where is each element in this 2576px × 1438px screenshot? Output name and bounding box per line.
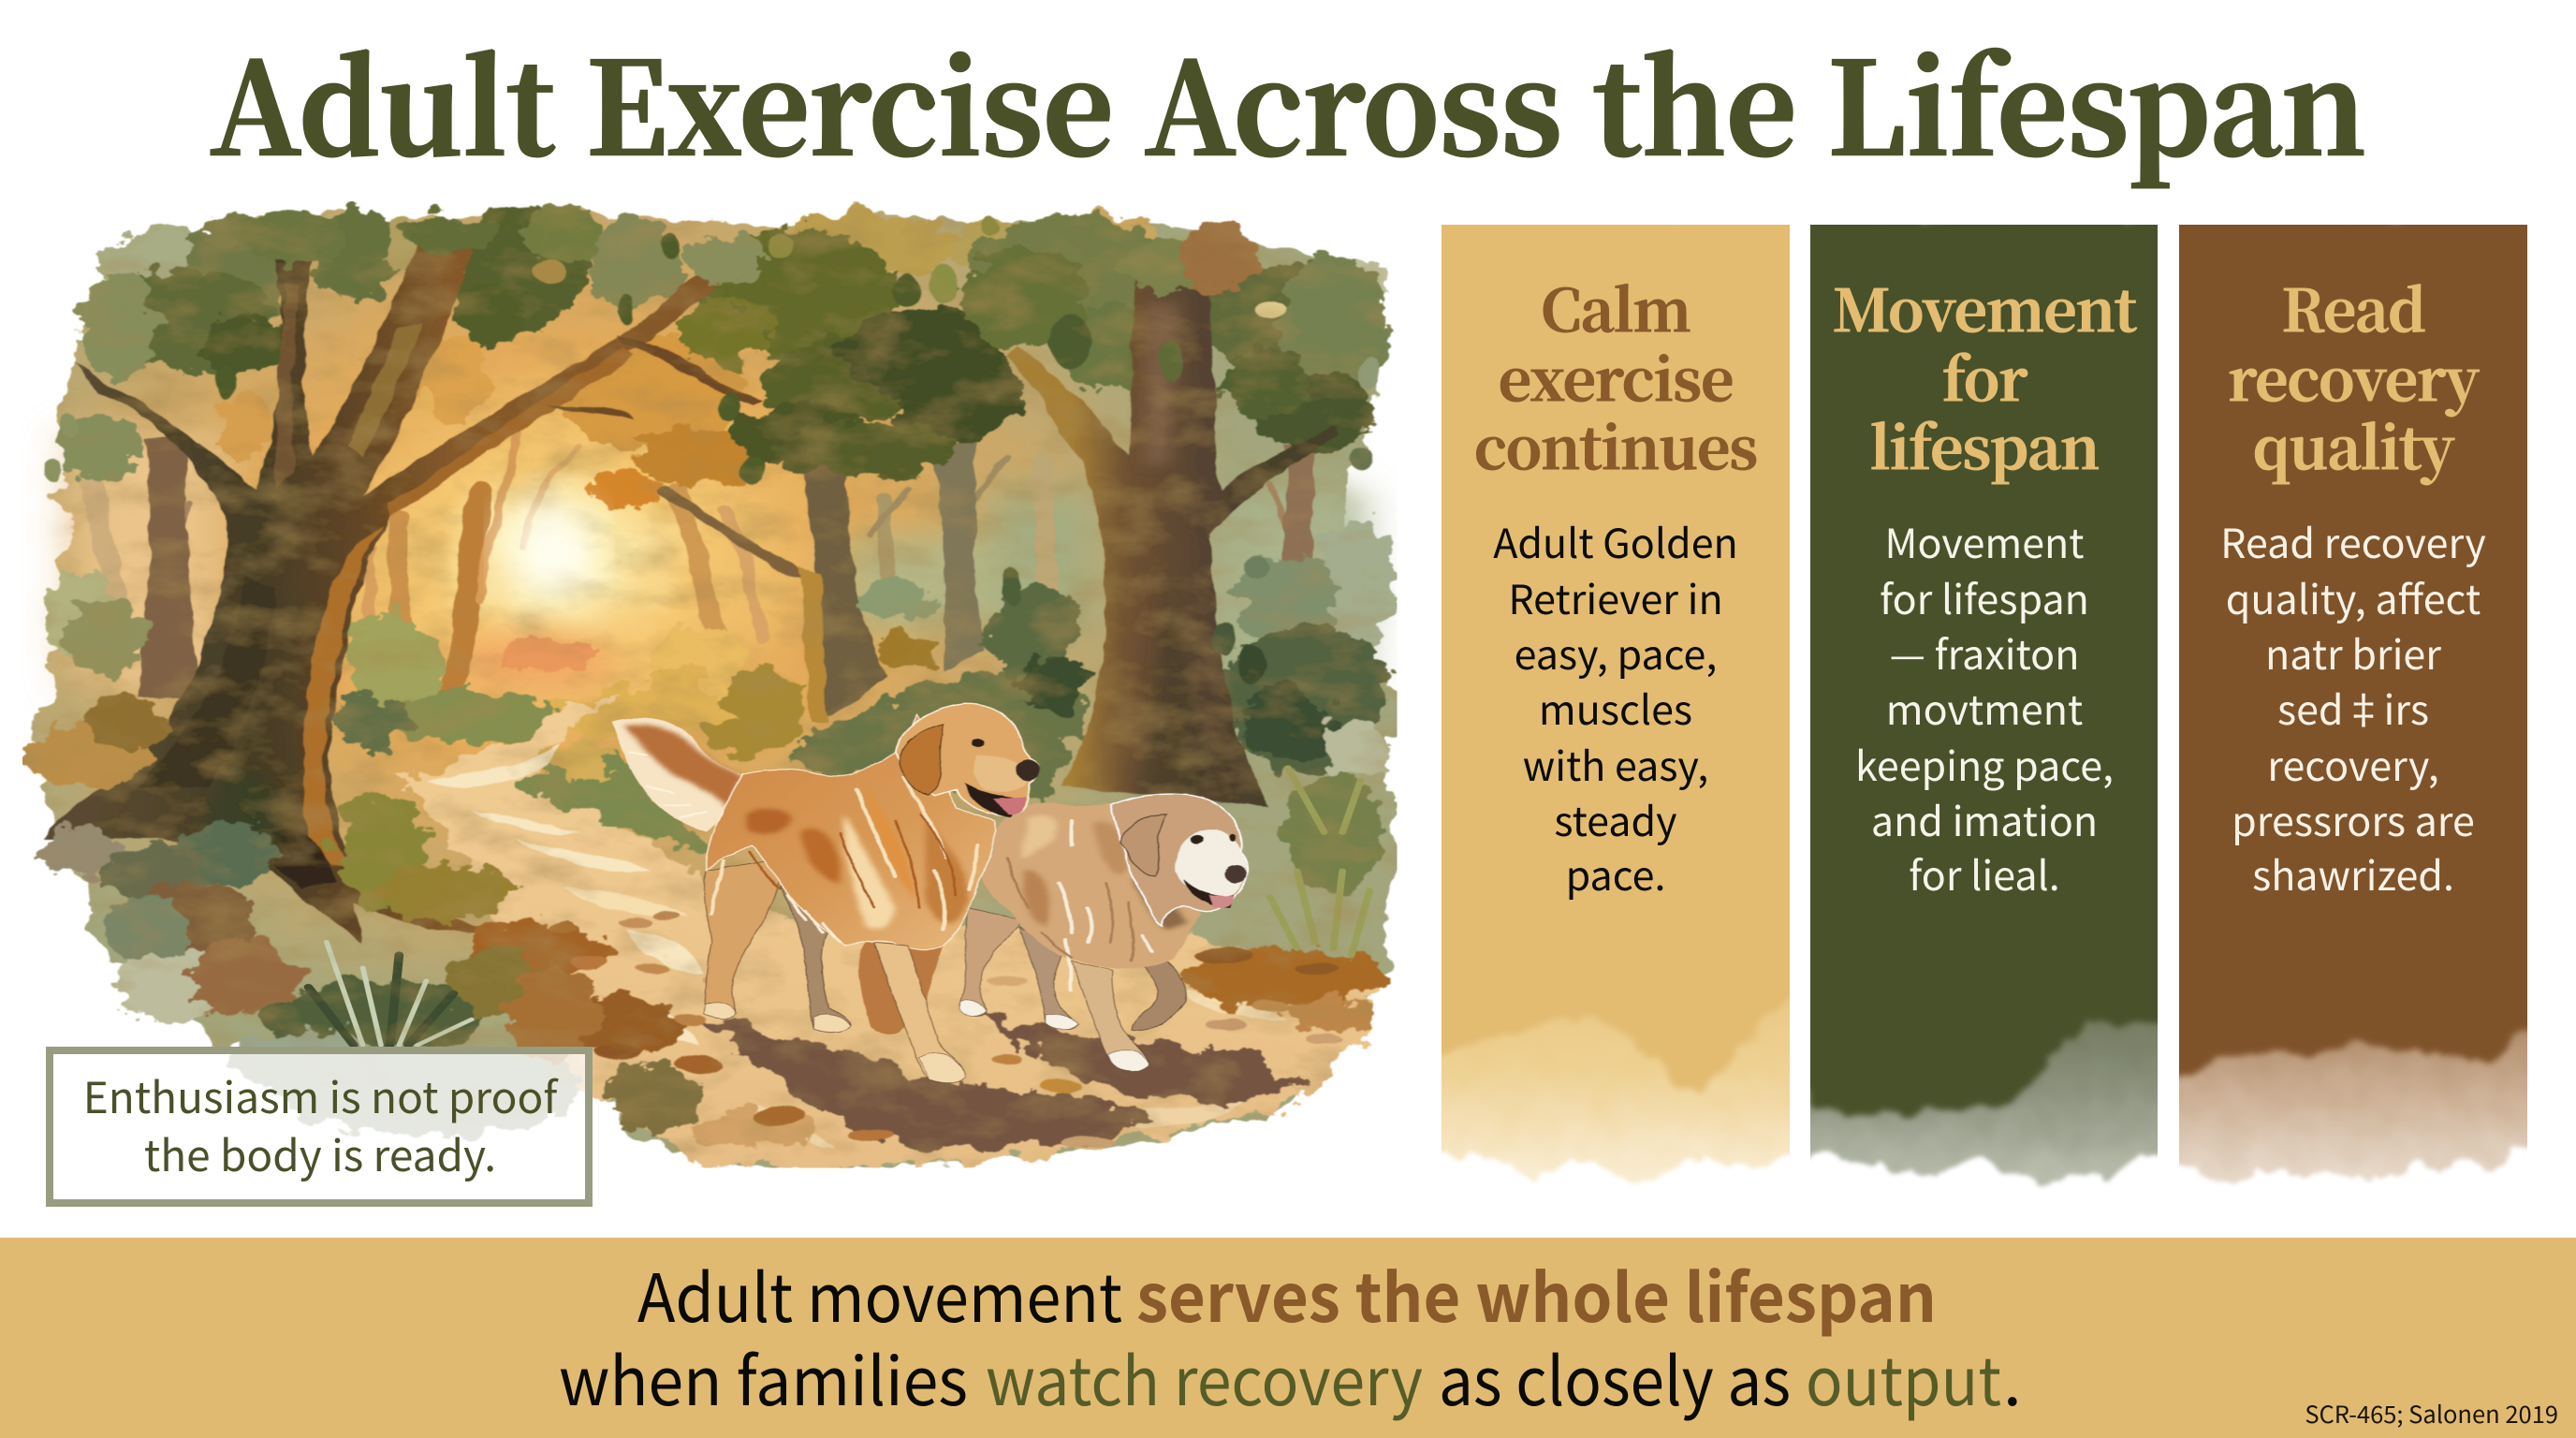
mid-ground trunks (136, 439, 1315, 723)
panel 2 body: — fraxiton (1890, 624, 2079, 682)
panel: movement for lifespan (1810, 225, 2158, 1189)
panel: read recovery quality (2179, 225, 2527, 1185)
ground and path (399, 697, 1379, 1167)
takeaway line 1 (637, 1246, 1937, 1342)
panel 3 body: Read recovery (2220, 512, 2486, 570)
dog shadows (708, 1016, 1297, 1148)
forest background wash (37, 213, 1388, 1167)
takeaway line 2 (559, 1329, 2022, 1425)
takeaway line 2: output (1806, 1329, 2001, 1425)
panel 1 body: Adult Golden (1493, 512, 1738, 570)
panel 2 body: keeping pace, (1855, 735, 2114, 793)
side washes (73, 433, 1361, 690)
panel 3 heading: quality (2253, 403, 2454, 486)
takeaway line 2: when families (559, 1329, 968, 1425)
panel 2 body: movtment (1886, 679, 2083, 737)
panel 2 heading: for (1942, 334, 2027, 418)
panel 2 heading: lifespan (1870, 403, 2099, 486)
panel 3 wash (2179, 225, 2527, 1185)
panel 3 heading: recovery (2228, 334, 2480, 418)
panel 1 body: pace. (1566, 844, 1665, 902)
panel 1 body: easy, pace, (1515, 624, 1717, 682)
panel 3 heading: Read (2281, 265, 2425, 348)
panel 3 body: natr brier (2265, 624, 2441, 682)
panel 2 body: for lifespan (1880, 568, 2089, 626)
panel 3 body: sed‡irs (2277, 679, 2429, 737)
panel 1 body: Retriever in (1508, 568, 1723, 626)
callout: Enthusiasm is not proof (50, 1050, 589, 1203)
panel 3 body: pressrors are (2232, 790, 2475, 848)
sun glow (508, 497, 590, 600)
front dog (612, 704, 1040, 1083)
main oak trunks (45, 226, 1338, 942)
path highlights (426, 742, 1288, 1149)
title: Adult Exercise Across the Lifespan (210, 7, 2366, 191)
illustration: golden retrievers on a forest path (22, 201, 1397, 1167)
panel: calm exercise continues (1442, 225, 1790, 1185)
panel 2 heading: Movement (1833, 265, 2138, 348)
dogs (612, 704, 1248, 1083)
takeaway line 2: as closely as (1439, 1329, 1791, 1425)
panel 1 body: with easy, (1523, 735, 1708, 793)
rear dog (960, 794, 1248, 1071)
foreground foliage left (22, 694, 1392, 1149)
panel 2 body: Movement (1885, 512, 2084, 570)
panel 1 wash (1442, 225, 1790, 1185)
takeaway line 2: watch recovery (986, 1329, 1423, 1425)
panel 1 heading: exercise (1499, 334, 1733, 418)
panel 2 body: and imation (1871, 790, 2098, 848)
callout: Enthusiasm is not proof: the body is ready. (144, 1123, 496, 1184)
panel 1 body: steady (1554, 790, 1677, 848)
canopy leaf details (45, 215, 1381, 684)
callout: Enthusiasm is not proof: Enthusiasm is not proof (83, 1064, 559, 1126)
takeaway line 1: serves the whole lifespan (1136, 1246, 1937, 1342)
panel 3 body: recovery, (2267, 735, 2439, 793)
grass blades (308, 768, 1369, 1045)
panel 1 body: muscles (1539, 679, 1692, 737)
panel 2 wash (1810, 225, 2158, 1189)
canopy wash (45, 201, 1397, 890)
takeaway line 1: Adult movement (637, 1246, 1122, 1342)
mid-ground bushes (336, 580, 1089, 806)
takeaway line 2: . (2003, 1329, 2022, 1425)
ground leaves (548, 912, 1344, 1149)
panel 3 body: quality, affect (2226, 568, 2481, 626)
panel 1 heading: continues (1474, 403, 1757, 486)
panel 3 body: shawrized. (2252, 844, 2454, 902)
trunk shading (199, 303, 1224, 858)
panel 1 heading: Calm (1541, 265, 1690, 348)
source note: SCR-465; Salonen 2019 (2305, 1396, 2558, 1431)
bottom banner (0, 1238, 2576, 1438)
panel 2 body: for lieal. (1909, 844, 2060, 902)
canopy overlaps (239, 212, 1251, 299)
distant trees (91, 433, 1293, 703)
